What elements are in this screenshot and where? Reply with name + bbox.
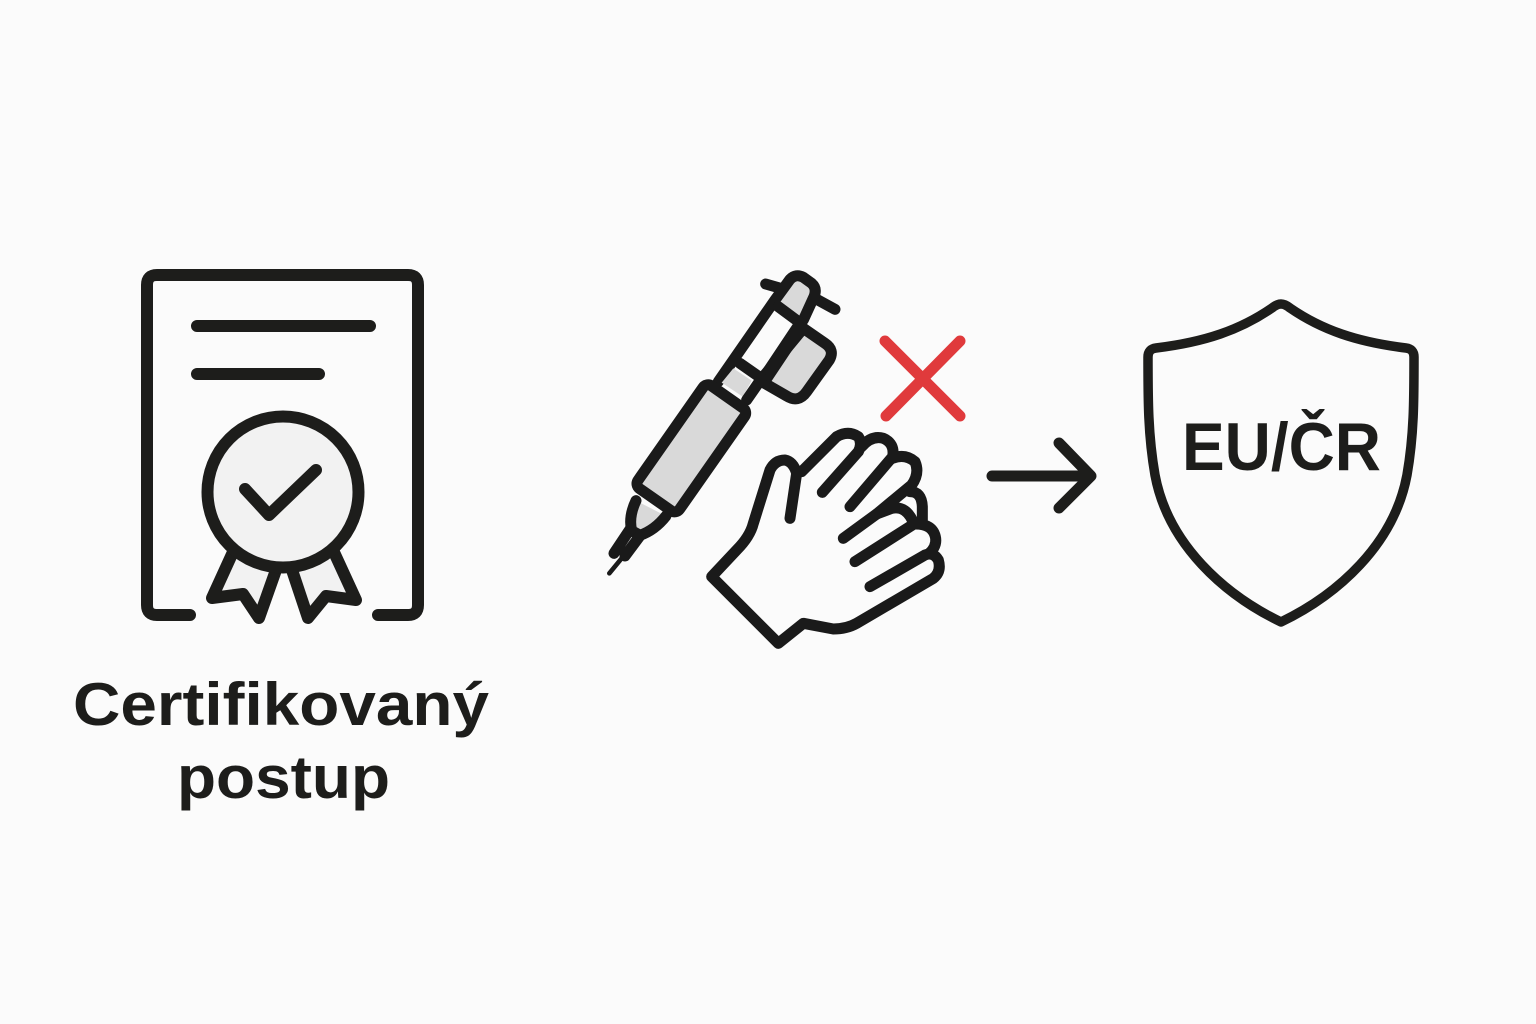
icon: hand xyxy=(712,433,939,643)
document outline xyxy=(147,275,418,615)
crossbar xyxy=(766,284,835,309)
caption: certified procedure xyxy=(73,671,490,811)
thick spine xyxy=(765,328,798,378)
shield label: EU/ČR xyxy=(1182,408,1381,485)
barrel xyxy=(635,382,748,514)
arrow xyxy=(992,443,1091,508)
seal with check mark xyxy=(208,416,358,568)
finger one xyxy=(802,433,860,492)
lower finger two xyxy=(914,524,936,553)
palm and thumb outline xyxy=(712,460,939,643)
needle tip xyxy=(631,501,666,535)
icon: shield with EU/ČR xyxy=(1148,304,1414,622)
lower spine xyxy=(747,378,762,400)
finger two xyxy=(850,438,893,507)
needle prongs xyxy=(614,528,639,556)
caption: certified procedure: postup xyxy=(177,744,390,811)
side box xyxy=(760,328,831,399)
upper tube xyxy=(718,276,815,382)
finger three xyxy=(843,456,917,538)
icon: red cross xyxy=(885,341,960,416)
knuckle xyxy=(910,492,922,520)
ribbon tails xyxy=(212,550,356,618)
tube bands xyxy=(740,307,802,377)
small collar xyxy=(722,368,752,397)
document text lines xyxy=(197,326,370,374)
lower finger one xyxy=(855,508,914,562)
icon: certificate document xyxy=(147,275,418,618)
caption: certified procedure: Certifikovaný xyxy=(73,671,490,738)
cap fill xyxy=(778,278,813,318)
shield outline xyxy=(1148,304,1414,622)
icon: tattoo pen xyxy=(609,276,835,573)
